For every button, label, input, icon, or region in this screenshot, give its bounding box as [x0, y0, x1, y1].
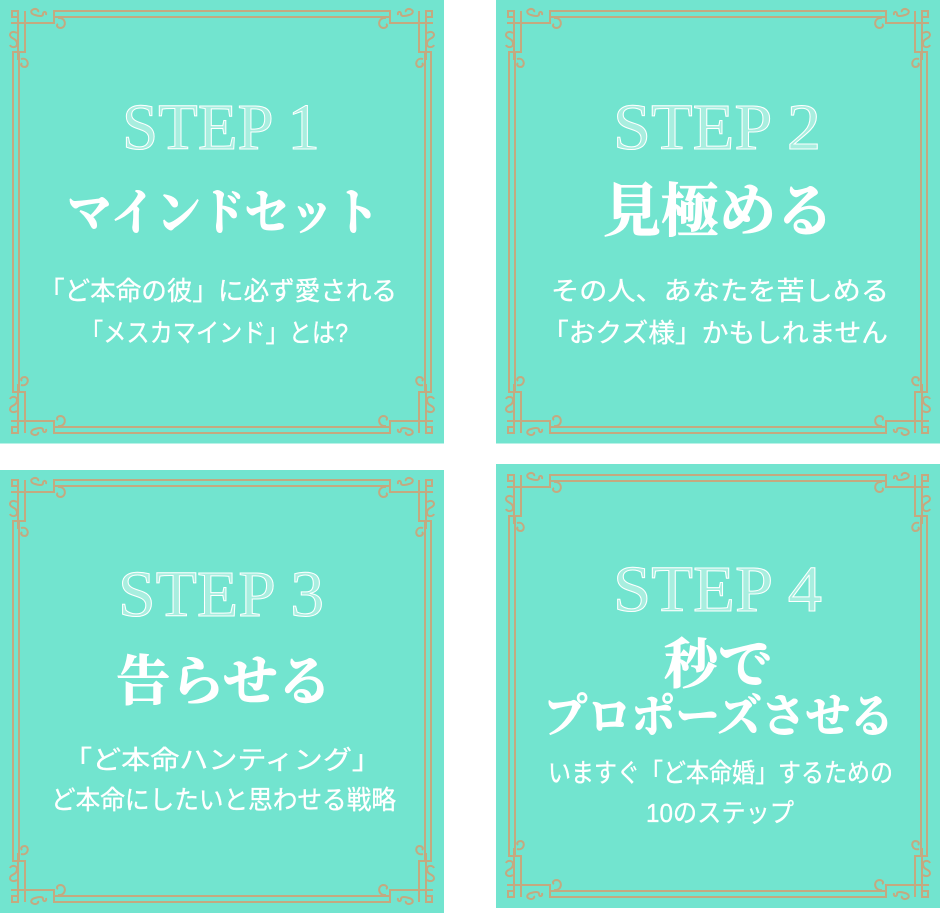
- description: step 1: 「ど本命の彼」に必ず愛される: [39, 276, 397, 306]
- description: step 2: [542, 276, 889, 348]
- panel background: step 1: [0, 0, 444, 444]
- ornamental frame: step 2: [506, 9, 930, 435]
- panel: step 4: [496, 464, 940, 908]
- description: step 4: [548, 758, 893, 828]
- panel: step 3: [0, 470, 444, 913]
- description: step 1: [39, 276, 397, 348]
- panel background: step 3: [0, 470, 444, 913]
- ornamental frame: step 4: [506, 473, 930, 899]
- description: step 1: 「メスカマインド」とは?: [80, 318, 348, 348]
- step label: STEP 3: STEP 3: [118, 558, 324, 631]
- panel: step 1: [0, 0, 444, 444]
- ornamental frame: step 1: [10, 9, 434, 435]
- description: step 3: [51, 745, 396, 815]
- heading: propose in seconds: 秒で: [664, 635, 772, 695]
- heading: see through: 見極める: [603, 179, 834, 244]
- description: step 3: ど本命にしたいと思わせる戦略: [51, 785, 396, 815]
- panel background: step 4: [496, 464, 940, 908]
- description: step 3: 「ど本命ハンティング」: [63, 745, 381, 775]
- step label: STEP 2: STEP 2: [613, 91, 821, 164]
- heading: propose in seconds: プロポーズさせる: [543, 691, 894, 742]
- panel background: step 2: [496, 0, 940, 444]
- step label: STEP 1: STEP 1: [122, 91, 320, 164]
- description: step 2: その人、あなたを苦しめる: [551, 276, 889, 306]
- panel: step 2: [496, 0, 940, 444]
- description: step 2: 「おクズ様」かもしれません: [542, 318, 888, 348]
- heading: let him know: 告らせる: [116, 652, 332, 712]
- step label: STEP 4: STEP 4: [613, 553, 822, 626]
- description: step 4: 10のステップ: [646, 798, 794, 828]
- heading: mindset: マインドセット: [67, 185, 379, 241]
- ornamental frame: step 3: [10, 478, 434, 904]
- description: step 4: いますぐ「ど本命婚」するための: [548, 758, 893, 788]
- heading: propose in seconds: [543, 635, 894, 742]
